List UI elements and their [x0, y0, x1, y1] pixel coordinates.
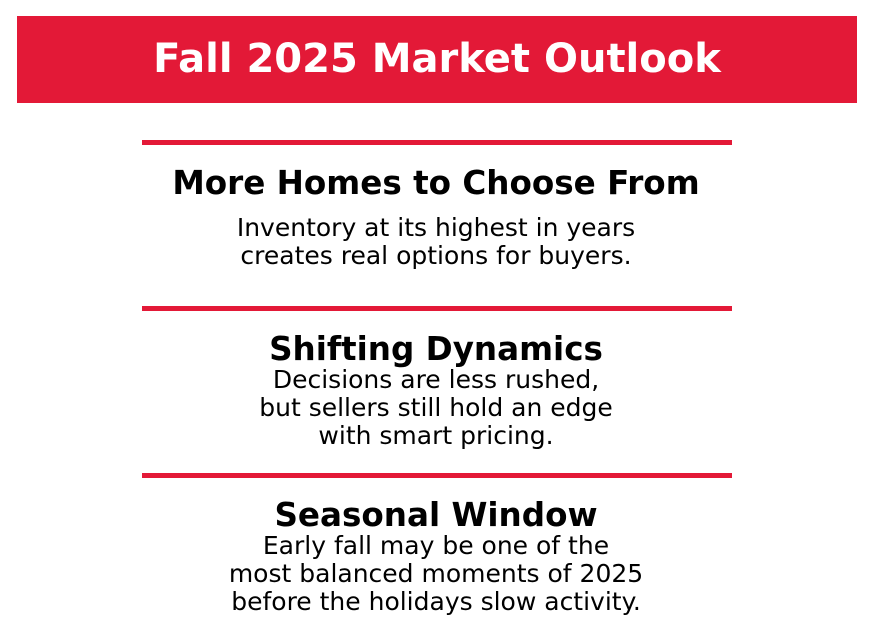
heading: shifting dynamics: Shifting Dynamics — [269, 330, 603, 368]
section: seasonal window — [229, 496, 643, 616]
heading: seasonal window: Seasonal Window — [274, 496, 598, 534]
text: more homes body — [237, 213, 635, 270]
section: shifting dynamics — [259, 330, 613, 450]
text: shifting dynamics body: but sellers still hold an edge — [259, 393, 613, 422]
text: shifting dynamics body: Decisions are less rushed, — [273, 365, 599, 394]
text: seasonal window body — [229, 531, 643, 616]
text: seasonal window body: before the holidays slow activity. — [231, 587, 641, 616]
section: more homes — [172, 164, 700, 270]
text: seasonal window body: Early fall may be one of the — [263, 531, 609, 560]
text: seasonal window body: most balanced moments of 2025 — [229, 559, 643, 588]
text: more homes body: Inventory at its highest in years — [237, 213, 635, 242]
text: shifting dynamics body: with smart pricing. — [318, 421, 554, 450]
title banner — [17, 16, 857, 103]
text: more homes body: creates real options for buyers. — [240, 241, 632, 270]
heading: more homes: More Homes to Choose From — [172, 164, 700, 202]
text: shifting dynamics body — [259, 365, 613, 450]
title banner: Fall 2025 Market Outlook — [153, 36, 721, 82]
